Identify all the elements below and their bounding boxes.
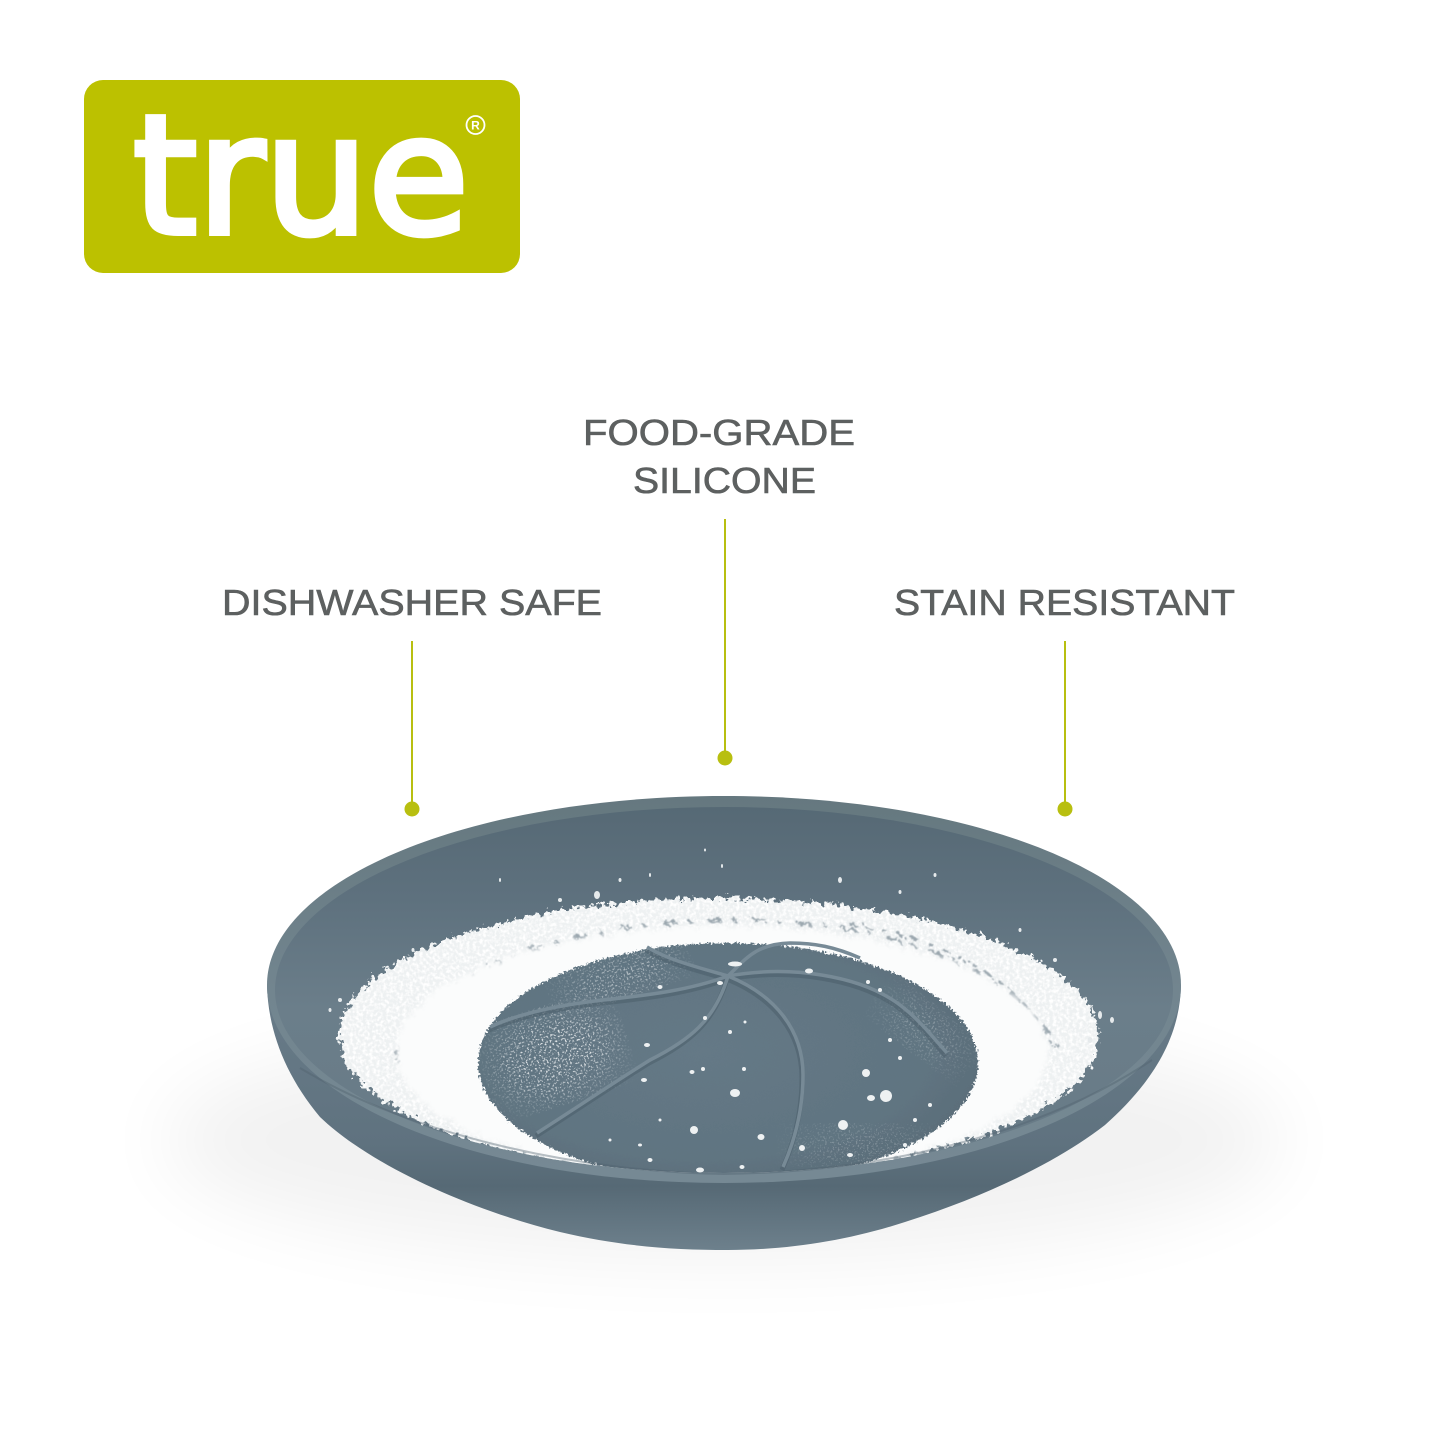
label: food-grade silicone: FOOD-GRADE xyxy=(583,412,855,453)
salt ring and dome xyxy=(328,848,1114,1183)
dome ribs xyxy=(489,943,947,1170)
salt groove xyxy=(395,920,1060,1060)
scattered salt on bowl wall xyxy=(328,848,1114,1043)
label: food-grade silicone xyxy=(583,412,855,501)
label: dishwasher safe: DISHWASHER SAFE xyxy=(222,582,602,623)
salt ring xyxy=(339,898,1099,1174)
label: food-grade silicone: SILICONE xyxy=(633,460,816,501)
front rim crease xyxy=(300,1060,1152,1174)
logo: true: true xyxy=(133,80,469,272)
infographic canvas xyxy=(84,80,1245,1250)
callout line: stain resistant xyxy=(1058,641,1072,816)
salt dust on dome xyxy=(483,996,627,1114)
callout line: dishwasher safe xyxy=(404,641,420,816)
soft shadow under bowl xyxy=(164,1020,1284,1260)
logo: true: R xyxy=(471,118,480,132)
bowl body xyxy=(267,985,1181,1250)
salt crystals xyxy=(608,962,932,1172)
product: silicone bowl with salt xyxy=(267,796,1181,1250)
bright inner salt band xyxy=(396,926,1048,1178)
bowl rim xyxy=(267,796,1181,1183)
label: stain resistant: STAIN RESISTANT xyxy=(894,582,1235,623)
bowl interior xyxy=(275,807,1173,1173)
central dome xyxy=(478,943,978,1183)
callout line: food-grade silicone xyxy=(718,519,732,766)
